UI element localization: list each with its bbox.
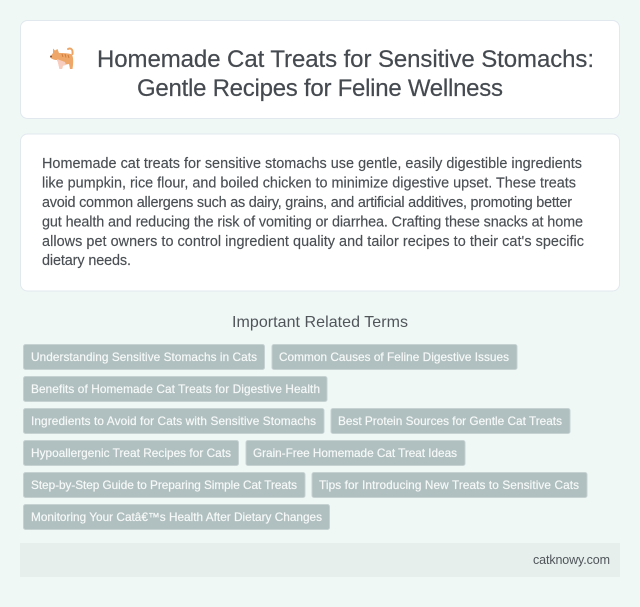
chip [331, 408, 570, 434]
chip [24, 440, 238, 466]
icon: cat [50, 48, 73, 69]
chip: Best Protein Sources for Gentle Cat Treats [338, 414, 562, 428]
chip [24, 408, 324, 434]
title: Homemade Cat Treats for Sensitive Stomachs: [97, 46, 594, 73]
chip: Step-by-Step Guide to Preparing Simple Cat Treats [31, 478, 297, 492]
chip [24, 344, 264, 370]
chip: Understanding Sensitive Stomachs in Cats [31, 350, 257, 364]
text block: description: like pumpkin, rice flour, and boiled chicken to minimize digestive upset. These treats [42, 176, 576, 192]
panel: title card [20, 20, 620, 118]
text block: description: avoid common allergens such as dairy, grains, and artificial additives, promoting better [42, 195, 572, 211]
chip: Monitoring Your Catâ€™s Health After Dietary Changes [31, 510, 322, 524]
panel: description card [20, 134, 620, 291]
chip [24, 504, 330, 530]
chip [246, 440, 465, 466]
chip: Grain-Free Homemade Cat Treat Ideas [253, 446, 457, 460]
chip [312, 472, 587, 498]
chip: Tips for Introducing New Treats to Sensitive Cats [319, 478, 579, 492]
title [97, 46, 594, 102]
title: Gentle Recipes for Feline Wellness [137, 75, 503, 102]
chip [272, 344, 517, 370]
text block: description: gut health and reducing the risk of vomiting or diarrhea. Crafting these snacks at home [42, 214, 583, 230]
text block: description: Homemade cat treats for sensitive stomachs use gentle, easily digestible ingredients [42, 156, 582, 172]
text block: description [42, 156, 584, 269]
chip: Hypoallergenic Treat Recipes for Cats [31, 446, 231, 460]
chip: Ingredients to Avoid for Cats with Sensitive Stomachs [31, 414, 316, 428]
footer bar [20, 543, 620, 577]
chip [24, 376, 327, 402]
heading: important related terms: Important Related Terms [232, 314, 408, 331]
chip: Benefits of Homemade Cat Treats for Digestive Health [31, 382, 320, 396]
text block: description: allows pet owners to control ingredient quality and tailor recipes to their cat's specific [42, 234, 584, 250]
chip: Common Causes of Feline Digestive Issues [279, 350, 509, 364]
term chips [24, 344, 587, 530]
text block: description: dietary needs. [42, 253, 131, 269]
footer text: catknowy.com [533, 553, 610, 567]
chip [24, 472, 305, 498]
